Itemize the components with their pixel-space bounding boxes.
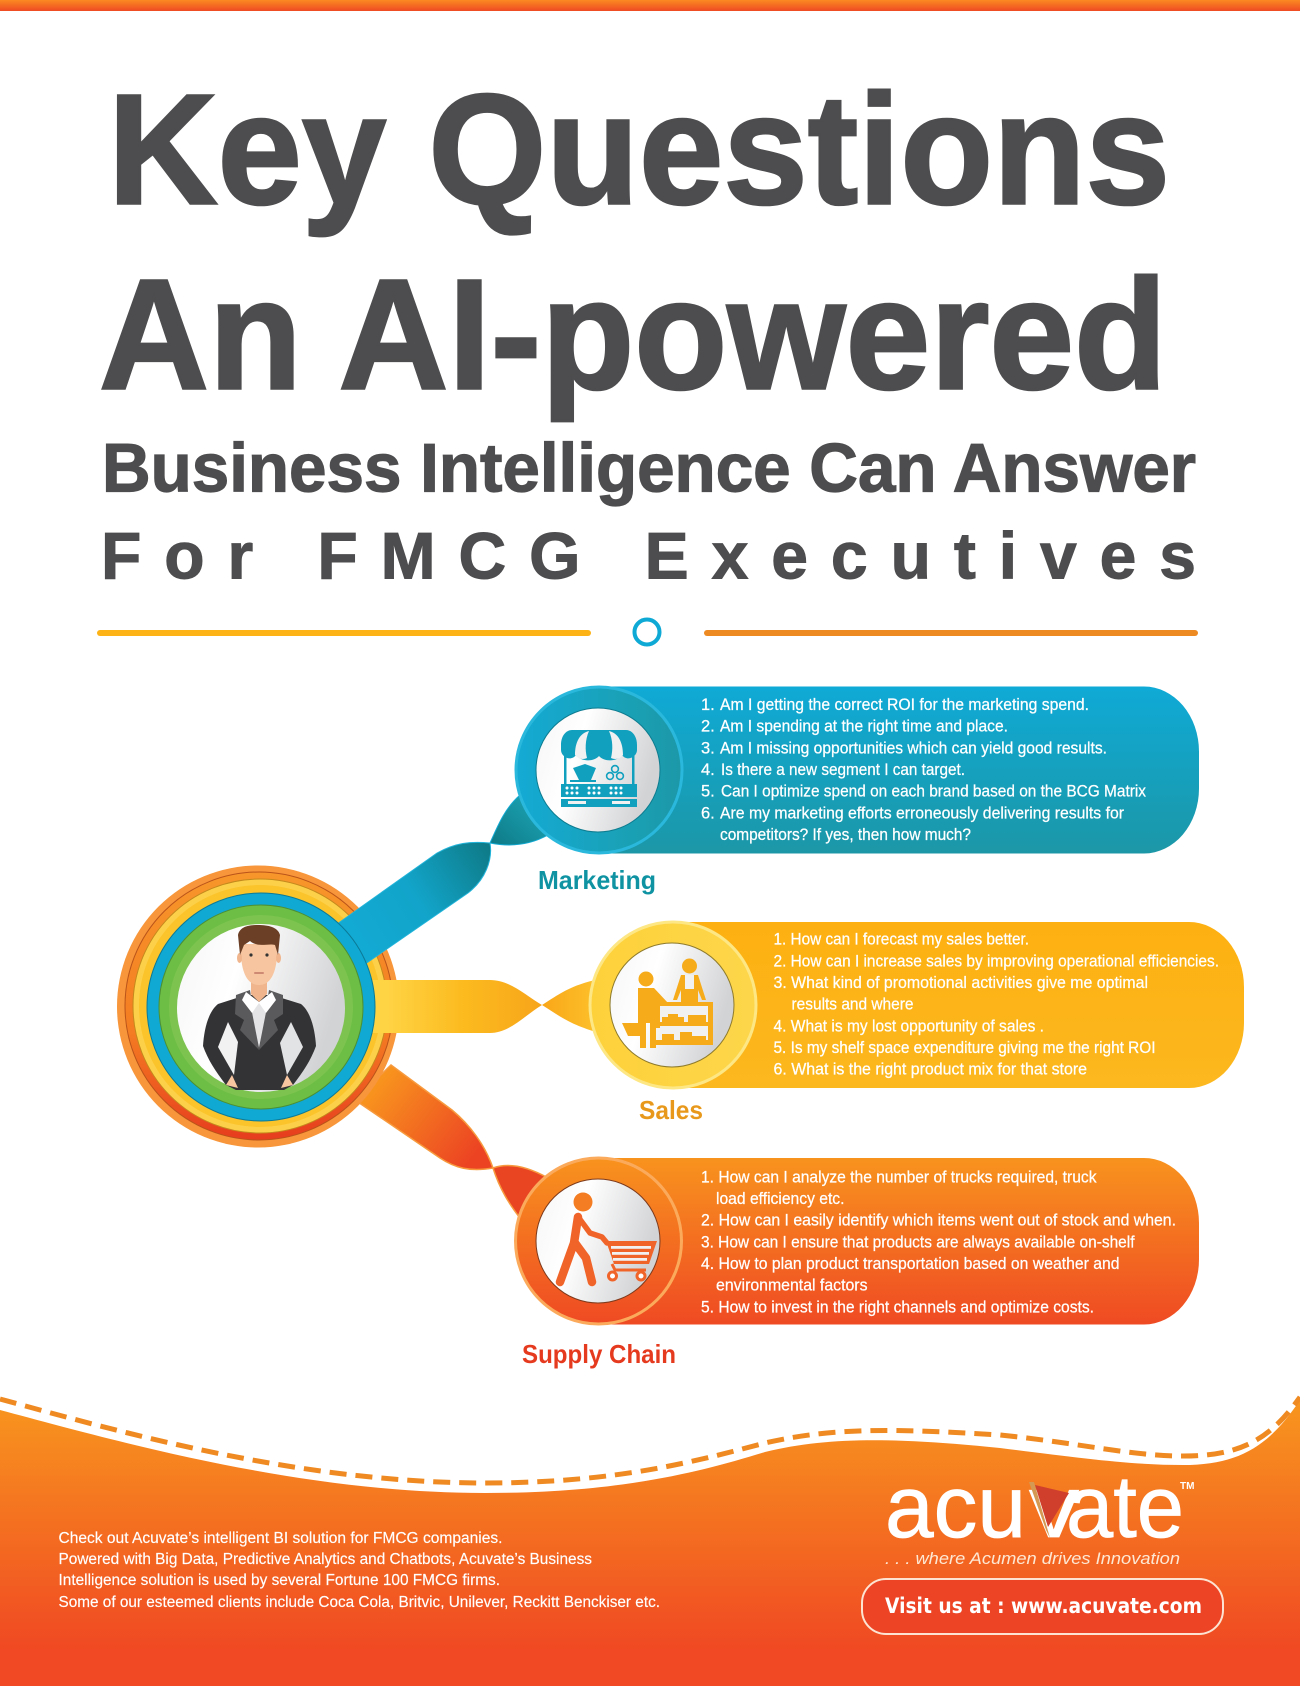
question list: environmental factors bbox=[716, 1277, 868, 1295]
concentric rings: inner bbox=[147, 893, 375, 1121]
question list: 2. bbox=[701, 718, 715, 736]
question list bbox=[701, 1168, 1176, 1316]
label: marketing: Marketing bbox=[538, 865, 656, 895]
question list: results and where bbox=[792, 996, 914, 1014]
wave background bbox=[0, 1400, 1300, 1686]
question list: 6. What is the right product mix for that store bbox=[774, 1061, 1087, 1079]
question list: Am I missing opportunities which can yield good results. bbox=[720, 739, 1107, 757]
question list: 1. How can I analyze the number of trucks required, truck bbox=[701, 1168, 1097, 1186]
button: visit us: Visit us at : www.acuvate.com bbox=[885, 1594, 1202, 1618]
question list: load efficiency etc. bbox=[716, 1190, 844, 1208]
badge ring bbox=[516, 687, 682, 853]
question list: Am I getting the correct ROI for the marketing spend. bbox=[720, 696, 1089, 714]
panel: sales bbox=[590, 922, 1244, 1125]
question list: 5. How to invest in the right channels and optimize costs. bbox=[701, 1298, 1094, 1316]
question list bbox=[774, 931, 1219, 1079]
panel: marketing bbox=[516, 686, 1199, 895]
divider with circle bbox=[97, 620, 1198, 644]
panel: supply chain bbox=[516, 1158, 1199, 1369]
icon: shop customer and seller bbox=[622, 958, 713, 1048]
logo: acuvate bbox=[885, 1457, 1194, 1556]
about text bbox=[58, 1530, 660, 1611]
subtitle: audience: For FMCG Executives bbox=[101, 518, 1196, 592]
question list: competitors? If yes, then how much? bbox=[720, 826, 971, 844]
question list: 4. How to plan product transportation based on weather and bbox=[701, 1255, 1120, 1273]
question list: 5. bbox=[701, 783, 715, 801]
badge ring bbox=[590, 922, 756, 1088]
logo: acuvate: ate bbox=[1066, 1457, 1184, 1556]
question list: 1. bbox=[701, 696, 715, 714]
ribbon: to marketing bbox=[330, 795, 548, 971]
icon: businessman bbox=[203, 925, 316, 1090]
question list: Am I spending at the right time and place. bbox=[720, 718, 1008, 736]
ribbon: to supply chain bbox=[355, 1065, 548, 1218]
top bar bbox=[0, 0, 1300, 11]
panel background bbox=[598, 1158, 1199, 1324]
panel background bbox=[673, 922, 1244, 1088]
logo: acuvate: acu bbox=[885, 1457, 1026, 1556]
logo: acuvate: TM bbox=[1180, 1481, 1194, 1492]
central figure bbox=[147, 893, 375, 1121]
about text: Powered with Big Data, Predictive Analytics and Chatbots, Acuvate’s Business bbox=[58, 1551, 592, 1568]
question list: Can I optimize spend on each brand based on the BCG Matrix bbox=[721, 783, 1147, 801]
about text: Check out Acuvate’s intelligent BI solution for FMCG companies. bbox=[58, 1530, 502, 1547]
icon: person pushing cart bbox=[560, 1192, 657, 1282]
question list: 3. What kind of promotional activities give me optimal bbox=[774, 974, 1148, 992]
question list: 2. How can I easily identify which items went out of stock and when. bbox=[701, 1212, 1176, 1230]
dashed stitch line bbox=[0, 1397, 1300, 1483]
question list: 1. How can I forecast my sales better. bbox=[774, 931, 1029, 949]
label: sales: Sales bbox=[639, 1095, 703, 1125]
panel background bbox=[598, 686, 1199, 854]
question list: Are my marketing efforts erroneously delivering results for bbox=[720, 804, 1124, 822]
about text: Intelligence solution is used by several Fortune 100 FMCG firms. bbox=[58, 1572, 500, 1589]
logo: acuvate: v bbox=[1029, 1457, 1079, 1556]
subtitle: Business Intelligence Can Answer bbox=[102, 430, 1196, 506]
question list: Is there a new segment I can target. bbox=[721, 761, 965, 779]
question list: 3. How can I ensure that products are always available on-shelf bbox=[701, 1233, 1135, 1251]
badge ring bbox=[516, 1158, 682, 1324]
icon: market stall bbox=[561, 730, 637, 807]
title bbox=[99, 62, 1196, 592]
question list bbox=[701, 696, 1147, 844]
tagline: . . . where Acumen drives Innovation bbox=[885, 1549, 1180, 1568]
question list: 5. Is my shelf space expenditure giving me the right ROI bbox=[774, 1039, 1156, 1057]
ribbon: to sales bbox=[372, 979, 600, 1033]
footer bbox=[0, 1397, 1300, 1686]
question list: 4. What is my lost opportunity of sales . bbox=[774, 1017, 1044, 1035]
question list: 4. bbox=[701, 761, 715, 779]
title line 1: Key Questions bbox=[108, 62, 1170, 238]
title line 2: An AI-powered bbox=[99, 248, 1167, 422]
central rings: outer bbox=[117, 866, 399, 1148]
question list: 2. How can I increase sales by improving operational efficiencies. bbox=[774, 952, 1219, 970]
question list: 3. bbox=[701, 739, 715, 757]
question list: 6. bbox=[701, 804, 715, 822]
about text: Some of our esteemed clients include Coca Cola, Britvic, Unilever, Reckitt Benckiser etc. bbox=[58, 1594, 660, 1611]
label: supply chain: Supply Chain bbox=[522, 1339, 676, 1369]
button: visit us bbox=[862, 1579, 1223, 1634]
